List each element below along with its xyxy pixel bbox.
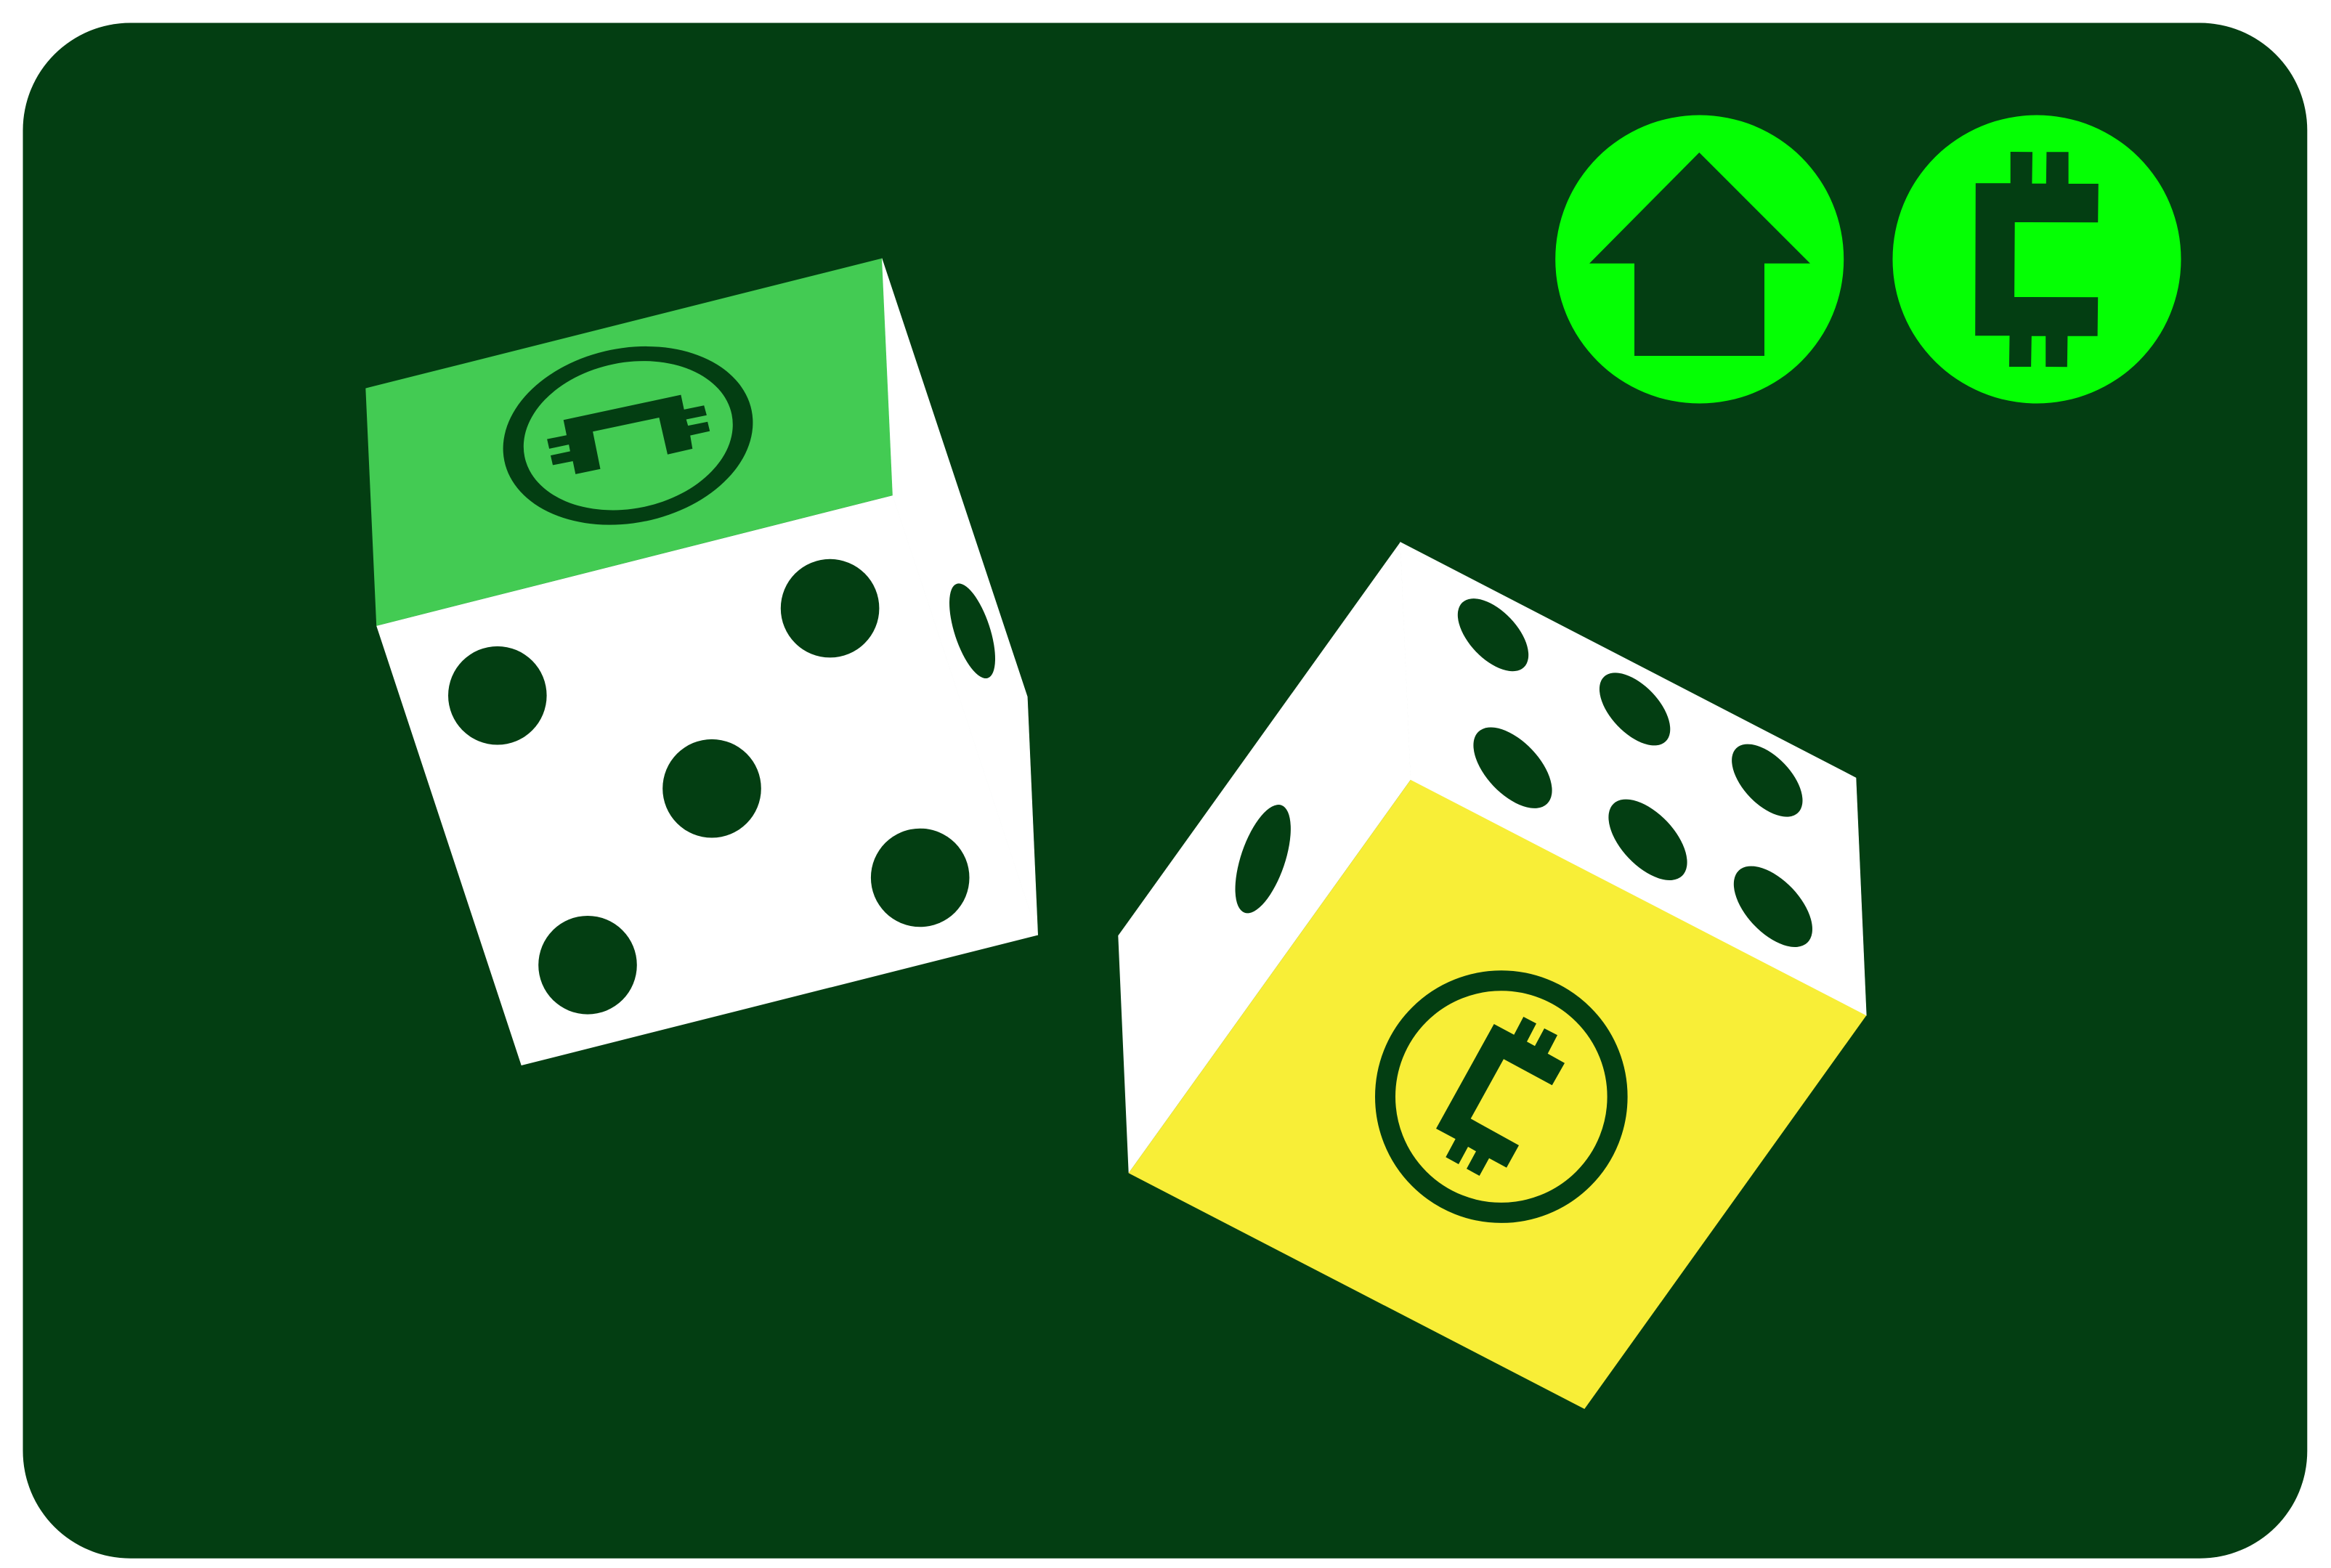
icon: skewed bitcoin glyph xyxy=(547,395,710,474)
icon: bitcoin badge xyxy=(1893,115,2181,404)
die: right, yellow front face xyxy=(1118,542,1866,1409)
icon: coin ring xyxy=(487,325,769,546)
die face: white top with six pips xyxy=(1400,542,1866,1015)
die face: yellow front with coin xyxy=(1129,780,1866,1409)
die face: white front with five pips xyxy=(376,495,1038,1065)
icon: up arrow badge xyxy=(1555,115,1844,404)
icon: rotated bitcoin glyph xyxy=(1436,1017,1565,1176)
die: left, green top face xyxy=(365,259,1038,1065)
die face: white left side with one pip xyxy=(1118,542,1411,1173)
icon: coin ring xyxy=(1385,980,1618,1213)
die face: green top with coin xyxy=(365,259,893,626)
die face: white right side with one pip xyxy=(882,259,1038,935)
